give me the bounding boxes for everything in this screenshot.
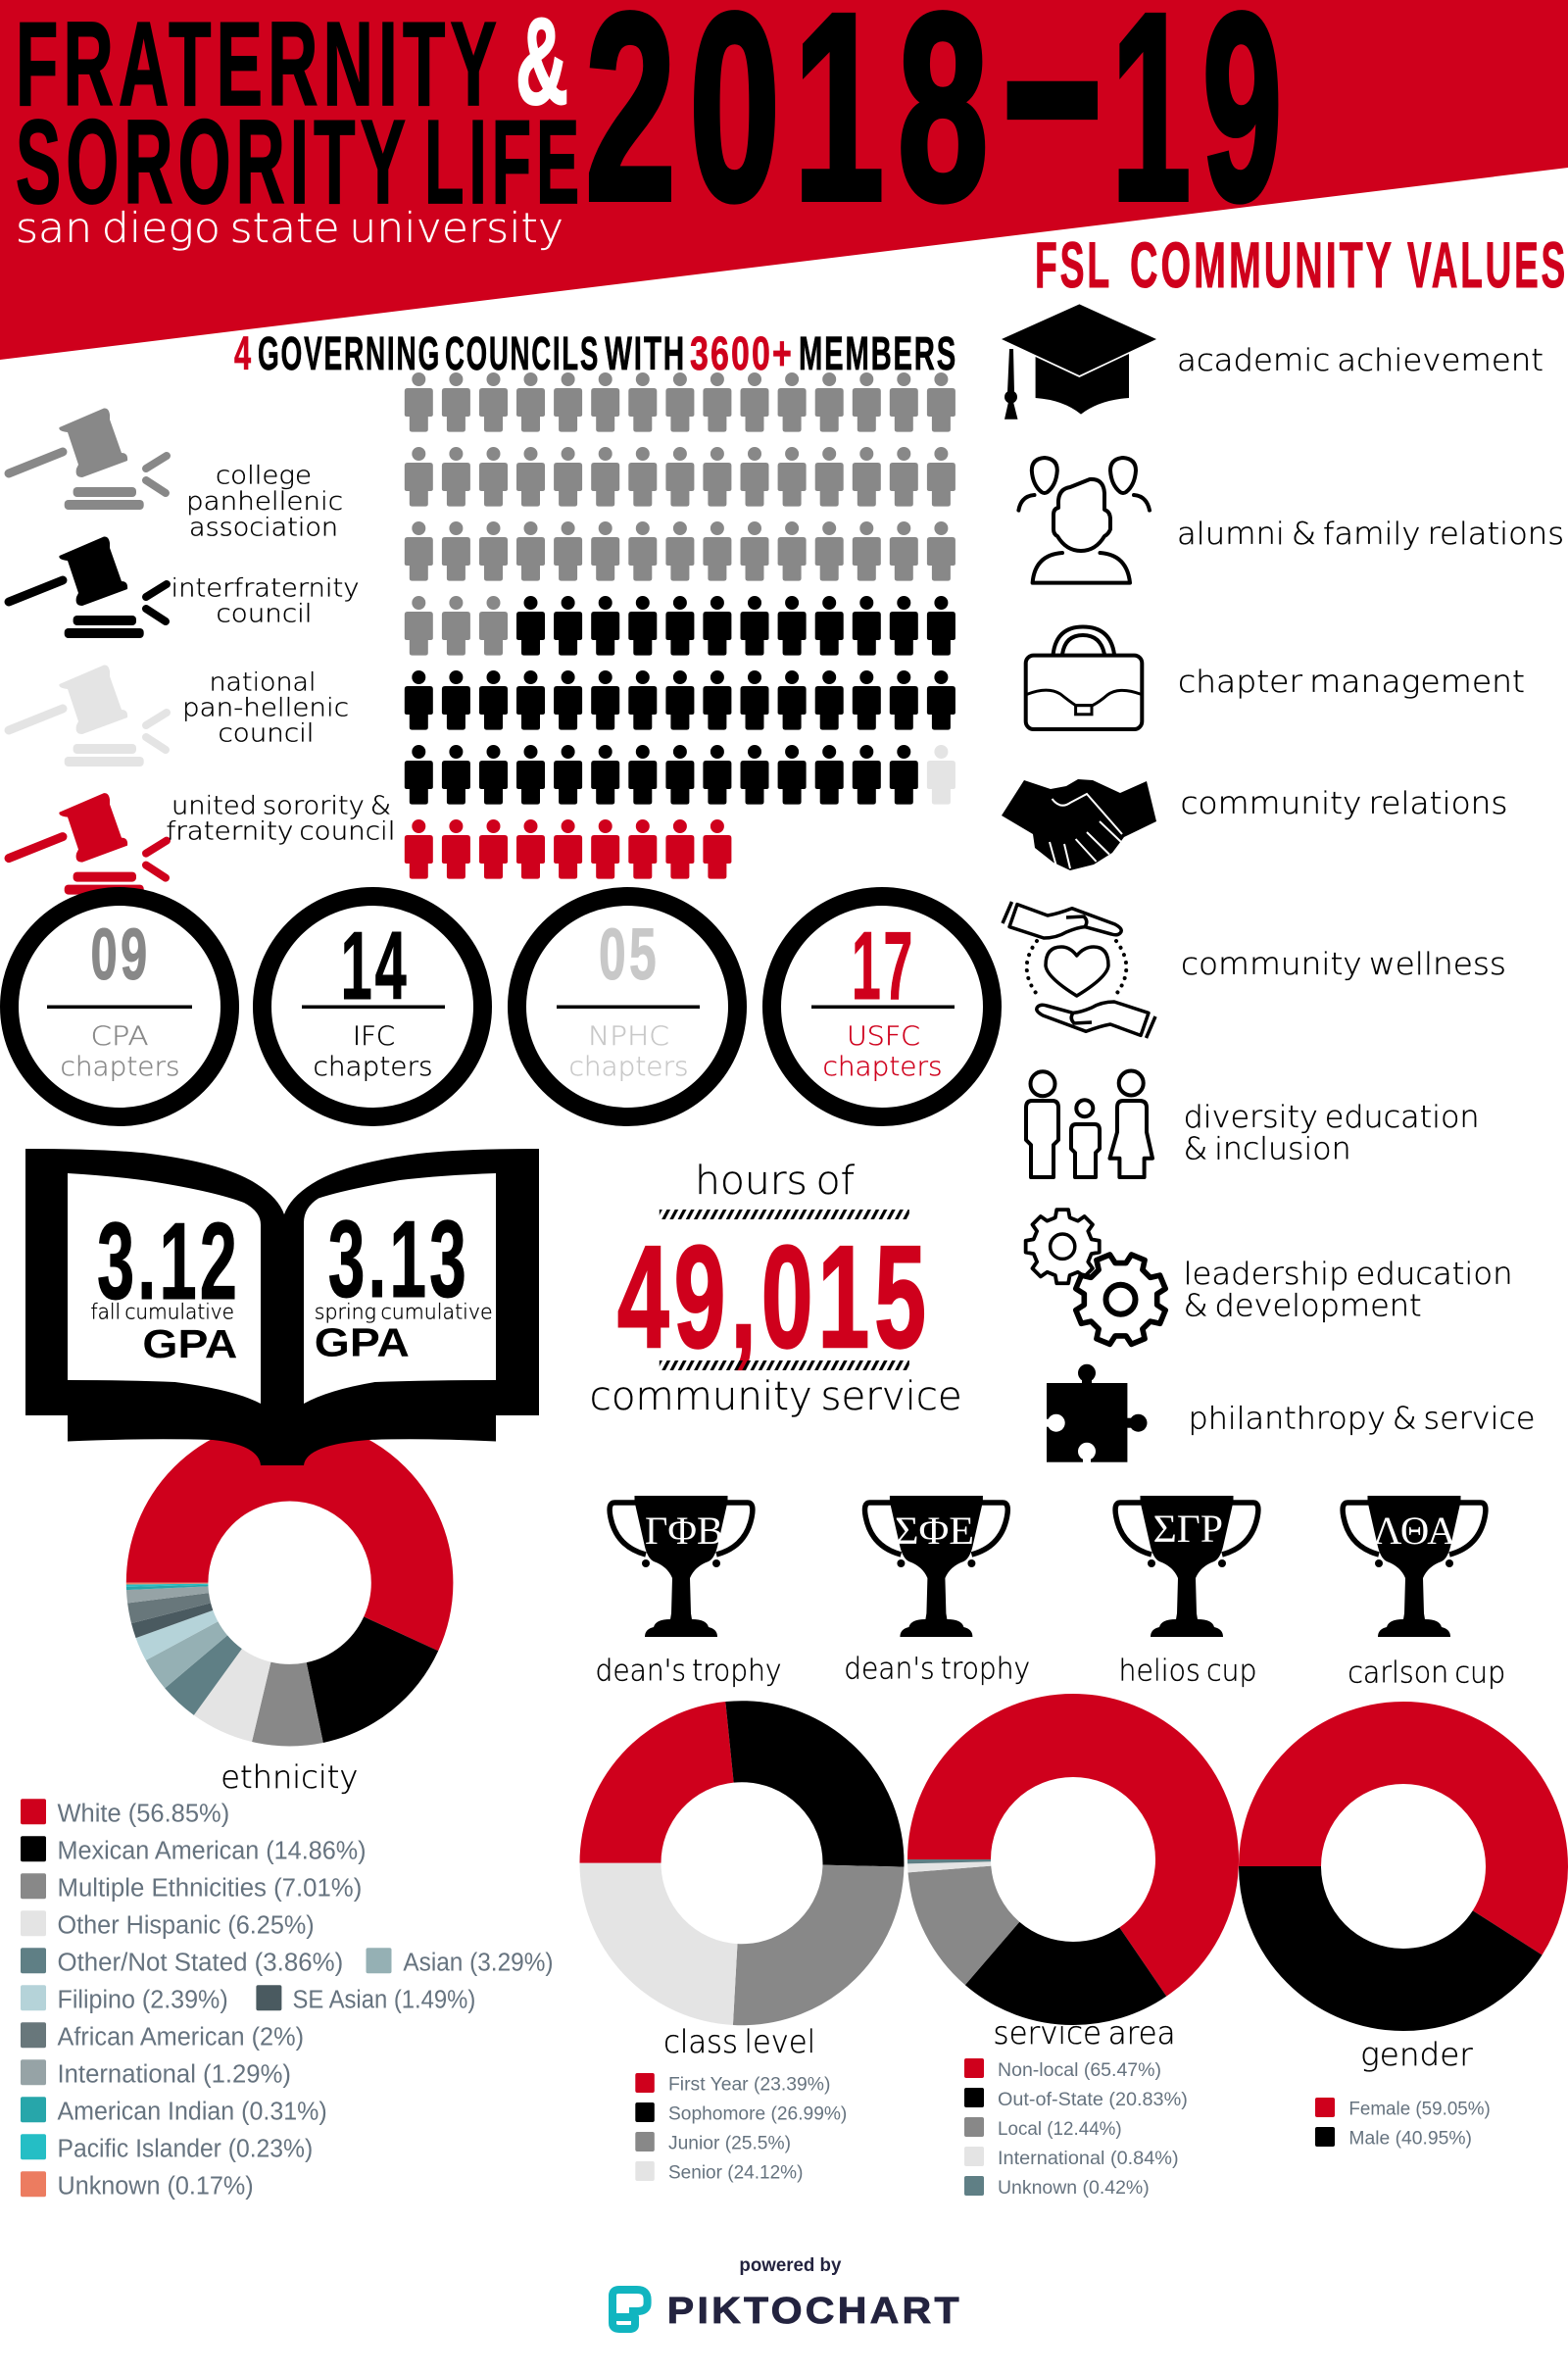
label: interfraternity council <box>171 574 359 629</box>
heading: governing councils: GOVERNING <box>258 328 441 380</box>
label: dean's trophy: dean's trophy <box>596 1654 782 1688</box>
legend: ethnicity: Mexican American (14.86%) <box>57 1837 367 1864</box>
legend: class level: Senior (24.12%) <box>668 2163 803 2184</box>
badge: CPA chapters: CPA <box>90 1021 149 1052</box>
badge: USFC chapters: USFC <box>847 1021 920 1052</box>
icon: briefcase <box>1026 627 1142 729</box>
legend: service area: Out-of-State (20.83%) <box>998 2090 1188 2110</box>
icon: alumni people <box>1018 458 1150 583</box>
number: 49,015: 49,015 <box>617 1216 931 1378</box>
legend: ethnicity: Filipino (2.39%) <box>57 1986 228 2013</box>
legend: gender: Male (40.95%) <box>1348 2129 1472 2150</box>
legend: ethnicity: International (1.29%) <box>57 2060 291 2088</box>
legend: class level: Sophomore (26.99%) <box>668 2104 847 2125</box>
text: hours of: hours of <box>695 1159 855 1204</box>
heading: service area: service area <box>994 2014 1176 2052</box>
badge: CPA chapters: 09 <box>90 914 151 995</box>
badge: IFC chapters: chapters <box>314 1052 433 1082</box>
text: chapter management: chapter management <box>1178 665 1525 700</box>
badge: USFC chapters: 17 <box>852 912 915 1019</box>
text: fall GPA <box>90 1201 240 1366</box>
text: diversity education & inclusion: diversity education <box>1184 1100 1480 1135</box>
legend: ethnicity: Other Hispanic (6.25%) <box>57 1911 315 1939</box>
subtitle: san diego state university <box>16 204 564 252</box>
text: fall GPA: GPA <box>142 1321 237 1366</box>
badge: IFC chapters <box>263 896 482 1117</box>
legend: ethnicity: Unknown (0.17%) <box>57 2172 254 2200</box>
icon: piktochart logo <box>612 2290 648 2329</box>
label: interfraternity council: council <box>216 600 312 629</box>
heading: ethnicity: ethnicity <box>220 1758 358 1796</box>
label: united sorority & fraternity council <box>167 792 396 847</box>
text: alumni & family relations: alumni & family relations <box>1177 517 1564 552</box>
title: fraternity & sorority life: SORORITY <box>16 95 411 228</box>
legend: gender <box>1315 2098 1491 2150</box>
chart: service area donut <box>949 1735 1198 1984</box>
label: national pan-hellenic council: pan-hellenic <box>182 694 349 723</box>
icon: trophy lambda theta alpha: ΛΘΑ <box>1373 1508 1456 1553</box>
badge: NPHC chapters: chapters <box>568 1052 688 1082</box>
heading: governing councils: WITH <box>605 328 686 380</box>
label: college panhellenic association: panhellenic <box>186 487 343 517</box>
text: leadership education & development: & development <box>1184 1289 1422 1324</box>
icon: gavel CPA <box>9 408 167 510</box>
text: community relations: community relations <box>1180 786 1507 821</box>
label: united sorority & fraternity council: fraternity council <box>167 817 396 847</box>
pictogram: members <box>405 372 956 879</box>
legend: ethnicity: SE Asian (1.49%) <box>292 1986 475 2013</box>
text: fall GPA: 3.12 <box>97 1201 240 1322</box>
badge: USFC chapters: chapters <box>823 1052 943 1082</box>
icon: open book with GPA <box>25 1149 539 1465</box>
text: spring GPA: 3.13 <box>328 1199 469 1320</box>
text: community service: community service <box>590 1374 962 1419</box>
legend: service area: Unknown (0.42%) <box>998 2178 1150 2199</box>
panel: service hours <box>590 1159 962 1419</box>
panel: trophies <box>596 1496 1505 1691</box>
icon: puzzle piece <box>1045 1364 1147 1463</box>
chart: ethnicity donut <box>168 1460 413 1706</box>
icon: gears <box>1026 1210 1180 1359</box>
footer: powered by piktochart: powered by <box>739 2255 842 2276</box>
legend: class level: Junior (25.5%) <box>668 2134 791 2154</box>
icon: handshake <box>1002 779 1156 870</box>
chart: gender donut <box>1280 1743 1527 1990</box>
legend: ethnicity: White (56.85%) <box>57 1800 229 1827</box>
icon: gavel USFC <box>9 793 167 895</box>
icon: graduation cap <box>1002 304 1156 420</box>
badge: USFC chapters <box>772 896 992 1117</box>
panel: councils with gavels <box>9 408 396 895</box>
label: carlson cup: carlson cup <box>1348 1657 1505 1691</box>
legend: gender: Female (59.05%) <box>1348 2100 1491 2120</box>
badge: NPHC chapters: NPHC <box>588 1021 669 1052</box>
text: diversity education & inclusion: & inclusion <box>1184 1132 1351 1167</box>
heading: class level: class level <box>663 2023 815 2060</box>
label: national pan-hellenic council <box>182 668 349 749</box>
text: diversity education & inclusion <box>1184 1100 1480 1167</box>
legend: service area <box>964 2058 1188 2199</box>
label: interfraternity council: interfraternity <box>171 574 359 604</box>
legend: service area: International (0.84%) <box>998 2149 1179 2169</box>
legend: ethnicity: African American (2%) <box>57 2023 304 2051</box>
legend: class level <box>635 2073 847 2184</box>
heading: governing councils <box>234 328 957 380</box>
label: national pan-hellenic council: council <box>218 719 314 749</box>
icon: trophy gamma phi beta: ΓΦΒ <box>645 1508 723 1553</box>
label: college panhellenic association: association <box>189 513 338 542</box>
text: spring GPA: GPA <box>315 1319 410 1364</box>
badge: IFC chapters: 14 <box>341 912 410 1019</box>
legend: ethnicity: American Indian (0.31%) <box>57 2098 327 2125</box>
icon: trophy sigma phi epsilon: ΣΦΕ <box>895 1508 974 1553</box>
legend: service area: Local (12.44%) <box>998 2119 1122 2140</box>
legend: ethnicity: Pacific Islander (0.23%) <box>57 2135 313 2162</box>
footer: powered by piktochart: PIKTOCHART <box>667 2291 962 2332</box>
icon: gavel IFC <box>9 536 167 638</box>
heading: FSL community values: FSL <box>1035 228 1112 301</box>
legend: ethnicity: Multiple Ethnicities (7.01%) <box>57 1874 362 1902</box>
text: leadership education & development <box>1184 1257 1513 1324</box>
heading: governing councils: MEMBERS <box>799 328 957 380</box>
heading: gender: gender <box>1360 2036 1474 2073</box>
icon: trophy sigma gamma rho <box>1115 1496 1258 1637</box>
label: helios cup: helios cup <box>1119 1654 1256 1688</box>
label: national pan-hellenic council: national <box>210 668 316 697</box>
legend: service area: Non-local (65.47%) <box>998 2060 1161 2081</box>
label: dean's trophy: dean's trophy <box>844 1653 1030 1687</box>
header red banner <box>0 0 1568 360</box>
heading: governing councils: 4 <box>234 328 253 380</box>
icon: trophy gamma phi beta <box>610 1496 753 1637</box>
heading: FSL community values: COMMUNITY <box>1130 228 1395 301</box>
title: fraternity & sorority life: FRATERNITY <box>16 0 502 130</box>
legend: class level: First Year (23.39%) <box>668 2075 830 2096</box>
badge: NPHC chapters: 05 <box>599 914 660 995</box>
title: fraternity & sorority life <box>16 0 584 228</box>
text: academic achievement: academic achievement <box>1177 343 1544 378</box>
chart: class level donut <box>620 1742 863 1985</box>
badge: CPA chapters: chapters <box>61 1052 180 1082</box>
text: spring GPA: spring cumulative <box>315 1301 493 1324</box>
icon: family outlines <box>1026 1070 1152 1177</box>
text: community wellness: community wellness <box>1181 947 1506 982</box>
text: philanthropy & service: philanthropy & service <box>1188 1402 1535 1437</box>
footer: powered by piktochart <box>612 2255 962 2332</box>
label: college panhellenic association <box>186 461 343 542</box>
legend: ethnicity: Asian (3.29%) <box>403 1949 553 1976</box>
heading: governing councils: COUNCILS <box>445 328 600 380</box>
badge: IFC chapters: IFC <box>353 1021 395 1052</box>
panel: community values list <box>1002 304 1564 1463</box>
text: fall GPA: fall cumulative <box>90 1301 234 1324</box>
heading: governing councils: 3600+ <box>690 328 794 380</box>
title: fraternity & sorority life: LIFE <box>424 95 584 228</box>
legend: ethnicity: Other/Not Stated (3.86%) <box>57 1949 343 1976</box>
label: college panhellenic association: college <box>216 461 312 490</box>
icon: gavel NPHC <box>9 665 167 767</box>
text: spring GPA <box>315 1199 493 1364</box>
icon: caring hands and heart <box>1003 902 1155 1038</box>
legend: ethnicity <box>21 1799 553 2200</box>
text: leadership education & development: leadership education <box>1184 1257 1513 1292</box>
badge: CPA chapters <box>10 896 229 1117</box>
panel: chapter counts <box>10 896 992 1117</box>
label: united sorority & fraternity council: united sorority & <box>172 792 391 821</box>
icon: trophy lambda theta alpha <box>1343 1496 1486 1637</box>
icon: trophy sigma gamma rho: ΣΓΡ <box>1153 1507 1223 1551</box>
badge: NPHC chapters <box>517 896 737 1117</box>
icon: trophy sigma phi epsilon <box>864 1496 1007 1637</box>
